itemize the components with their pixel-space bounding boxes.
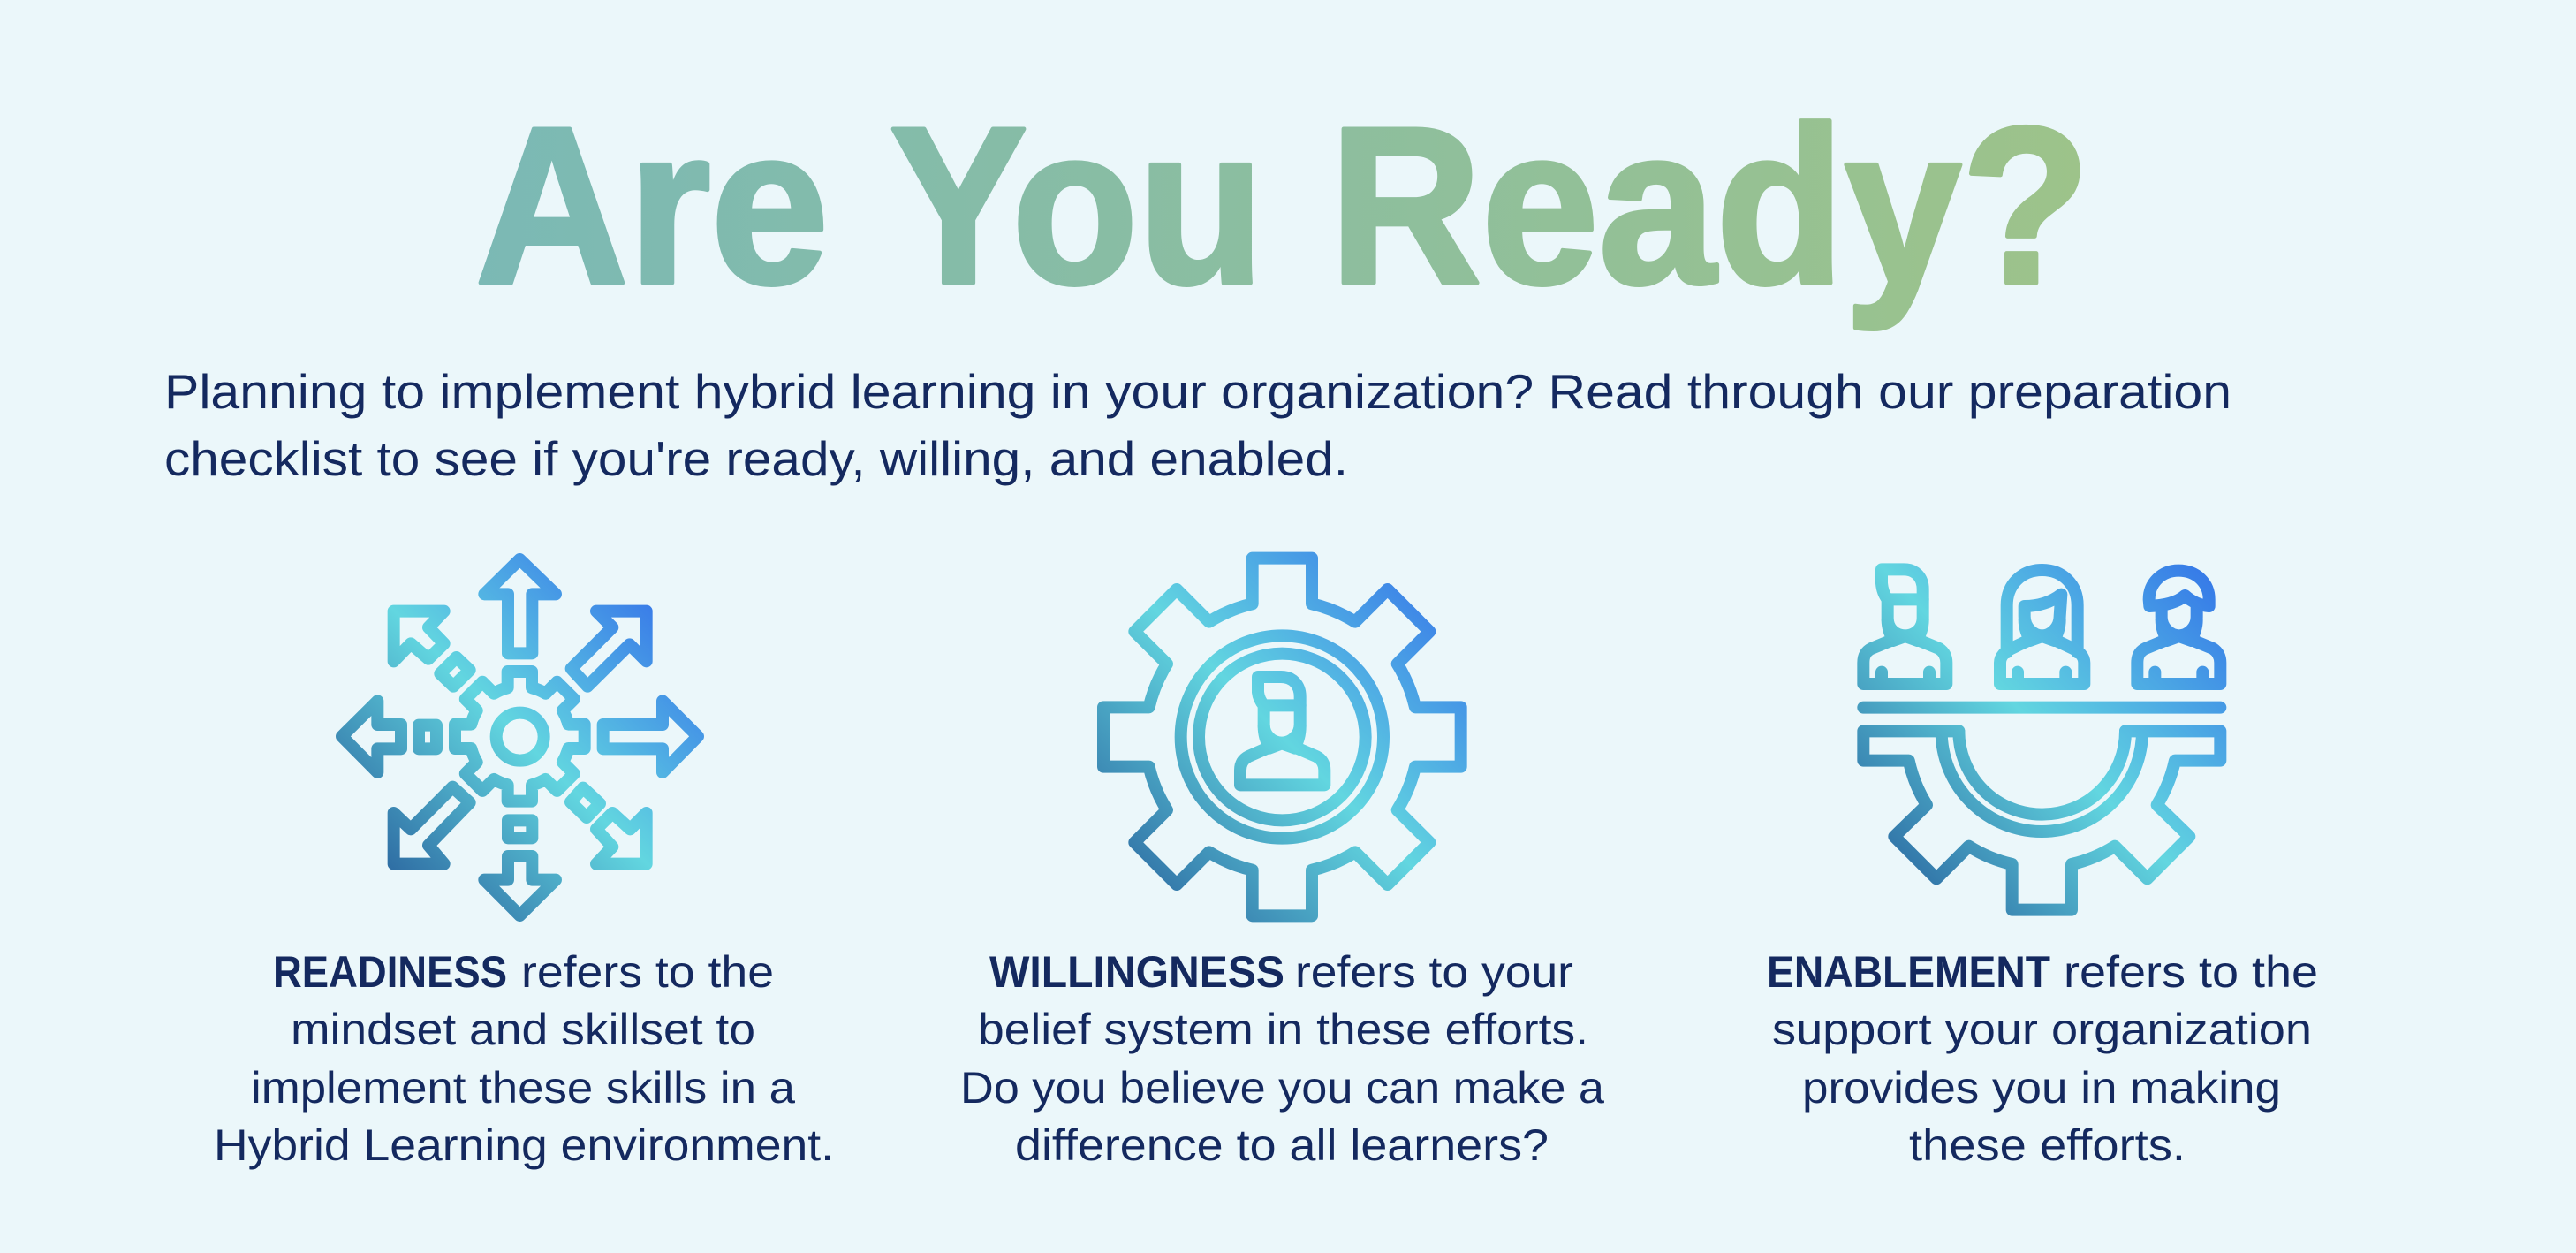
caption: enablement: provides you in making bbox=[1802, 1063, 2281, 1113]
title bbox=[475, 80, 2090, 330]
panel: willingness bbox=[960, 558, 1604, 1170]
person middle bbox=[2000, 570, 2084, 684]
intro text bbox=[164, 364, 2231, 486]
intro text: checklist to see if you're ready, willing, and enabled. bbox=[164, 431, 1348, 486]
intro text: Planning to implement hybrid learning in your organization? Read through our preparation bbox=[164, 364, 2231, 419]
caption: readiness bbox=[214, 947, 834, 1170]
panel: enablement bbox=[1767, 569, 2318, 1170]
icon: people on half gear bbox=[1863, 569, 2220, 910]
half gear bbox=[1863, 731, 2220, 910]
caption: willingness bbox=[960, 947, 1604, 1170]
caption: readiness: mindset and skillset to bbox=[291, 1005, 755, 1054]
caption: enablement: these efforts. bbox=[1909, 1120, 2186, 1170]
caption: readiness: Hybrid Learning environment. bbox=[214, 1120, 834, 1170]
gear hub bbox=[496, 713, 544, 761]
arrow up-right bbox=[572, 611, 647, 687]
caption: enablement: ENABLEMENT bbox=[1767, 947, 2050, 997]
title: Ready? bbox=[1330, 80, 2090, 330]
caption: enablement: refers to the bbox=[2064, 947, 2318, 997]
small connector squares bbox=[419, 657, 600, 838]
arrow right bbox=[603, 701, 698, 772]
caption: willingness: refers to your bbox=[1295, 947, 1573, 997]
person bbox=[1240, 677, 1324, 785]
icon: gear with arrows bbox=[342, 559, 698, 915]
arrow left bbox=[342, 701, 401, 772]
caption: readiness: READINESS bbox=[273, 947, 507, 997]
caption: enablement bbox=[1767, 947, 2318, 1170]
caption: willingness: WILLINGNESS bbox=[989, 947, 1284, 997]
caption: enablement: support your organization bbox=[1772, 1005, 2312, 1054]
arrow up-left bbox=[394, 611, 444, 661]
caption: willingness: difference to all learners? bbox=[1015, 1120, 1549, 1170]
outer ring bbox=[1181, 635, 1383, 839]
person left bbox=[1863, 569, 1946, 684]
table bar bbox=[1863, 689, 2220, 726]
gear outline bbox=[1103, 558, 1461, 915]
arrow down bbox=[484, 856, 556, 915]
inner ring bbox=[1199, 654, 1366, 820]
caption: willingness: belief system in these efforts. bbox=[978, 1005, 1588, 1054]
caption: readiness: refers to the bbox=[521, 947, 774, 997]
icon: gear with person bbox=[1103, 558, 1461, 915]
central gear bbox=[455, 672, 585, 801]
caption: readiness: implement these skills in a bbox=[251, 1063, 795, 1113]
caption: willingness: Do you believe you can make a bbox=[960, 1063, 1604, 1113]
person right bbox=[2137, 571, 2220, 684]
half gear inner rings bbox=[1942, 731, 2142, 832]
arrow up bbox=[484, 559, 556, 653]
title: You bbox=[890, 80, 1264, 330]
arrow down-right bbox=[596, 813, 647, 864]
panel: readiness bbox=[214, 559, 834, 1170]
title: Are bbox=[475, 80, 829, 330]
arrow down-left bbox=[394, 787, 470, 864]
